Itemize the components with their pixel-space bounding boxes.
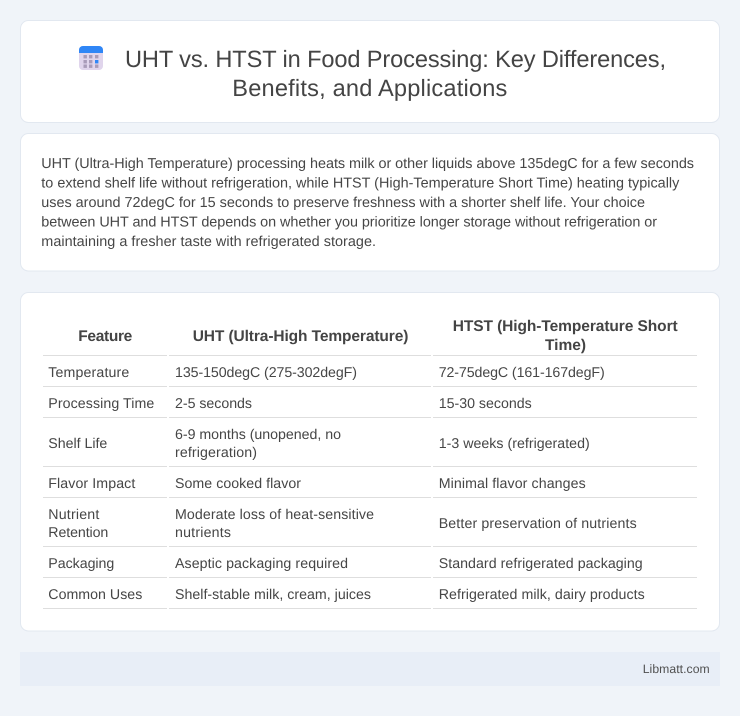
panel: header card — [20, 20, 720, 122]
table row: packaging: Aseptic packaging required — [175, 556, 348, 572]
table row: shelf life — [43, 427, 697, 467]
table row: temperature: 72-75degC (161-167degF) — [439, 365, 605, 381]
footer: Libmatt.com — [643, 662, 710, 676]
table row: flavor impact — [43, 476, 697, 498]
table row: nutrient retention: Moderate loss of heat-sensitive — [175, 507, 374, 523]
table row: nutrient retention: Retention — [48, 525, 108, 541]
table header row: UHT (Ultra-High Temperature) — [193, 328, 408, 345]
table row: flavor impact: Minimal flavor changes — [439, 476, 586, 492]
table row: packaging: Standard refrigerated packaging — [439, 556, 643, 572]
text block: introduction paragraph: to extend shelf life without refrigeration, while HTST (High-Temperature Short Time) heating typically — [41, 176, 680, 192]
title: UHT vs. HTST in Food Processing: Key Differences, — [125, 47, 666, 73]
table row: flavor impact: Some cooked flavor — [175, 476, 301, 492]
icon: calendar — [79, 46, 103, 70]
table row: nutrient retention — [43, 507, 697, 547]
table row: processing time: 2-5 seconds — [175, 396, 252, 412]
table header row: Feature — [78, 328, 133, 345]
title — [125, 47, 666, 102]
footer — [20, 652, 720, 686]
table row: shelf life: 6-9 months (unopened, no — [175, 427, 341, 443]
table row: processing time: 15-30 seconds — [439, 396, 532, 412]
table row: processing time: Processing Time — [48, 396, 154, 412]
table row: shelf life: 1-3 weeks (refrigerated) — [439, 436, 590, 452]
table header row: HTST (High-Temperature Short — [453, 318, 678, 335]
table row: shelf life: refrigeration) — [175, 445, 257, 461]
text block: introduction paragraph: UHT (Ultra-High Temperature) processing heats milk or other liquids above 135degC for a few seconds — [41, 156, 694, 172]
table row: common uses: Common Uses — [48, 587, 142, 603]
text block: introduction paragraph: uses around 72degC for 15 seconds to preserve freshness with a shorter shelf life. Your choice — [41, 195, 645, 211]
table row: common uses: Refrigerated milk, dairy products — [439, 587, 645, 603]
table row: nutrient retention: Better preservation of nutrients — [439, 516, 637, 532]
table row: processing time — [43, 396, 697, 418]
table row: shelf life: Shelf Life — [48, 436, 107, 452]
panel: introduction — [20, 134, 720, 271]
table header row — [43, 318, 697, 356]
table row: packaging — [43, 556, 697, 578]
table row: common uses — [43, 587, 697, 609]
text block: introduction paragraph: maintaining a fresher taste with refrigerated storage. — [41, 234, 376, 250]
table row: packaging: Packaging — [48, 556, 114, 572]
table row: common uses: Shelf-stable milk, cream, juices — [175, 587, 371, 603]
text block: introduction paragraph — [41, 156, 694, 250]
table row: flavor impact: Flavor Impact — [48, 476, 135, 492]
table row: temperature — [43, 365, 697, 387]
table row: temperature: 135-150degC (275-302degF) — [175, 365, 357, 381]
table row: nutrient retention: nutrients — [175, 525, 231, 541]
title: Benefits, and Applications — [232, 76, 507, 102]
table row: nutrient retention: Nutrient — [48, 507, 99, 523]
table row: temperature: Temperature — [48, 365, 129, 381]
panel: comparison table — [20, 292, 720, 631]
text block: introduction paragraph: between UHT and HTST depends on whether you prioritize longer storage without refrigeration or — [41, 214, 657, 230]
table header row: Time) — [545, 337, 586, 354]
